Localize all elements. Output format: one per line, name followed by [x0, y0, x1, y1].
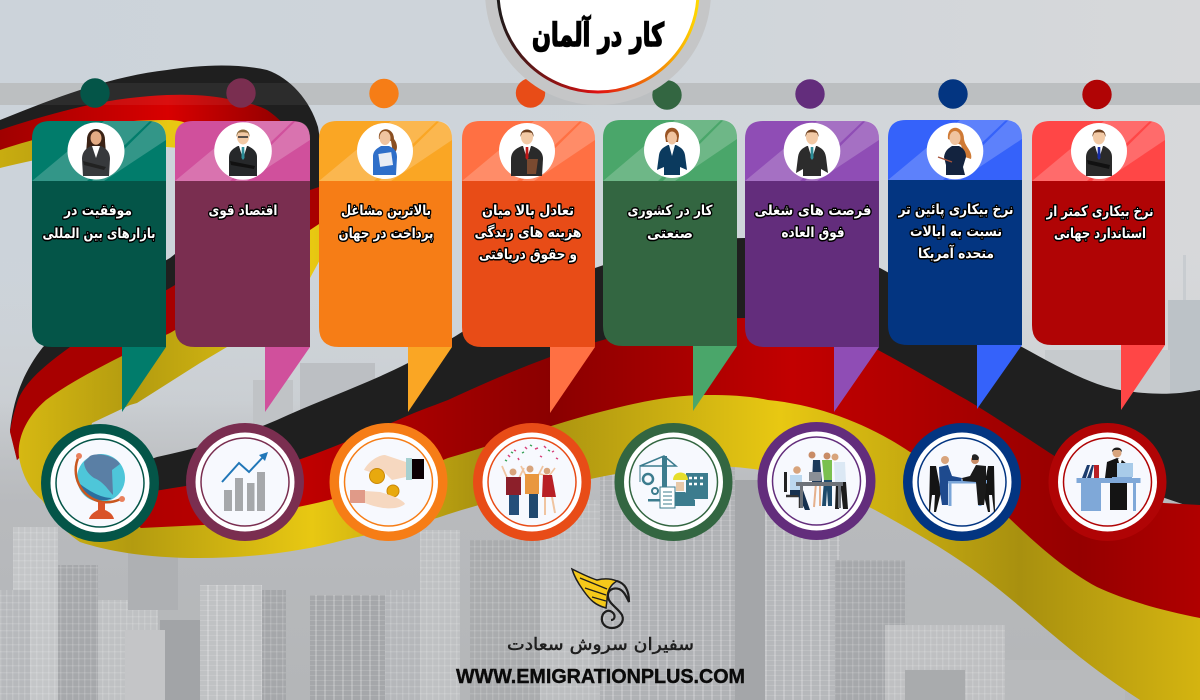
avatar: man with glasses: [214, 122, 272, 180]
card text: استاندارد جهانی: [1054, 226, 1146, 242]
card text: [754, 203, 872, 241]
icon: hands with coins: [330, 423, 448, 541]
title: کار در آلمان: [532, 15, 664, 54]
panel: card 1 international markets: [32, 121, 166, 412]
card text: نرخ بیکاری پائین تر: [898, 202, 1014, 218]
card text: بازارهای بین المللی: [42, 226, 156, 242]
card text: کار در کشوری: [628, 203, 713, 219]
card text: [898, 202, 1014, 262]
logo: company name: سفیران سروش سعادت: [507, 635, 694, 655]
avatar: man with blue tie: [1071, 123, 1127, 179]
card text: هزینه های زندگی: [474, 224, 582, 241]
logo: winged bird emblem: [572, 569, 629, 628]
card text: صنعتی: [647, 226, 693, 242]
card text: اقتصاد قوی: [208, 203, 278, 219]
panel: card 7 lower unemployment than USA: [888, 120, 1022, 409]
icon: construction and industry: [614, 423, 732, 541]
card text: نرخ بیکاری کمتر از: [1046, 204, 1154, 220]
card text: موفقیت در: [63, 203, 132, 219]
avatar: man with teal tie: [784, 123, 840, 179]
avatar: businesswoman: [68, 122, 124, 180]
avatar: woman in blue: [357, 123, 413, 179]
title badge: [485, 0, 711, 105]
card text: متحده آمریکا: [918, 244, 994, 262]
card text: فوق العاده: [782, 225, 844, 241]
card text: پرداخت در جهان: [338, 226, 434, 242]
panel: card 3 highest paid jobs: [319, 121, 452, 412]
icon: man at office desk: [1048, 423, 1166, 541]
panel: card 4 balance of cost and salary: [462, 121, 595, 413]
card text: [42, 203, 156, 242]
card text: تعادل بالا میان: [482, 203, 574, 219]
card text: و حقوق دریافتی: [479, 247, 577, 263]
card text: فرصت های شغلی: [754, 203, 872, 219]
panel: card 2 strong economy: [175, 121, 310, 412]
card text: [1046, 204, 1154, 242]
card text: [338, 203, 434, 242]
icon: growth bar chart: [186, 423, 304, 541]
panel: card 8 below world standard: [1032, 121, 1165, 410]
icon: business handshake: [903, 423, 1021, 541]
icon: office team: [758, 422, 876, 540]
card text: [628, 203, 713, 242]
card text: نسبت به ایالات: [910, 224, 1002, 240]
icon: globe: [41, 424, 159, 542]
horizontal timeline strip: [0, 83, 1200, 105]
icon: celebrating people: [473, 423, 591, 541]
avatar: woman with long red hair: [927, 123, 983, 179]
panel: card 6 great job opportunities: [745, 121, 879, 412]
panel: card 5 industrial country: [603, 120, 737, 411]
website url: WWW.EMIGRATIONPLUS.COM: [456, 665, 745, 688]
avatar: woman in navy suit: [644, 122, 700, 178]
card text: بالاترین مشاغل: [341, 203, 431, 219]
card text: [474, 203, 582, 263]
timeline dots: [80, 78, 1112, 110]
avatar: man with folder: [499, 123, 555, 179]
